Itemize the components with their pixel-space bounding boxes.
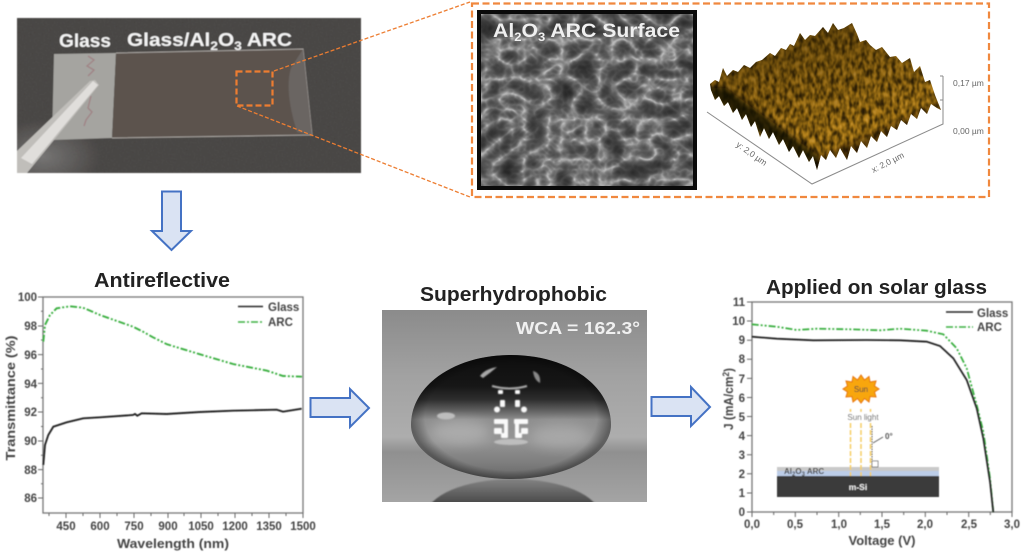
x axis labels: 1500 [290, 521, 316, 533]
x axis labels: 2,0 [917, 519, 933, 531]
layer labels: ARC [805, 467, 824, 476]
label: Glass/Al2O3 ARC: O [218, 30, 234, 50]
layer labels: 2 [792, 472, 796, 478]
axis title: Voltage: Voltage (V) [848, 533, 916, 548]
arrow: right 2 [652, 387, 710, 426]
icon: sun [843, 375, 879, 403]
SEM heading: Al [493, 20, 512, 42]
x axis labels: 1200 [222, 521, 248, 533]
y axis labels: 0 [739, 507, 745, 519]
x axis labels: 600 [90, 521, 110, 533]
heading: Superhydrophobic: Superhydrophobic [420, 284, 607, 306]
legend: ARC [268, 317, 293, 329]
SEM heading: 2 [514, 30, 522, 44]
heading: Antireflective: Antireflective [94, 270, 230, 292]
y axis labels: 98 [24, 321, 38, 333]
AFM axes [707, 76, 943, 184]
inset: solar cell schematic: m-Si [849, 482, 867, 492]
y axis labels: 92 [24, 407, 37, 419]
y axis labels: 8 [739, 354, 746, 366]
inset: solar cell schematic: Sun light [847, 413, 879, 422]
x axis labels: 1,0 [831, 519, 847, 531]
layer labels: 3 [802, 472, 806, 478]
x axis labels: 750 [124, 521, 144, 533]
y axis labels: 7 [739, 374, 745, 386]
SEM heading: ARC Surface [545, 20, 680, 42]
coated glass area [112, 49, 312, 138]
uncoated glass area [52, 53, 116, 140]
AFM labels: x: 2,0 µm [870, 150, 906, 175]
y axis labels: 9 [739, 335, 745, 347]
x axis labels: 450 [56, 521, 76, 533]
x axis labels [56, 521, 316, 533]
photo: water droplet [382, 310, 647, 502]
x axis labels: 1050 [188, 521, 214, 533]
AFM labels [734, 78, 984, 175]
layer labels: Al [784, 467, 792, 476]
label: Glass/Al2O3 ARC: Glass/Al [127, 30, 199, 50]
WCA label: WCA = 162.3° [516, 318, 640, 338]
layer labels: O [795, 467, 802, 476]
axis title: Wavelength: Wavelength (nm) [117, 536, 229, 551]
AFM labels: y: 2,0 µm [734, 139, 769, 168]
axis title: J: J (mA/cm [721, 371, 736, 430]
y axis labels [18, 292, 38, 505]
droplet glints [437, 367, 540, 445]
light rays [850, 409, 870, 476]
inset: solar cell schematic: 0° [885, 432, 893, 441]
handwriting on glass [84, 56, 94, 126]
x axis labels: 900 [158, 521, 178, 533]
inset: solar cell schematic: Sun [854, 385, 868, 394]
y axis labels: 1 [739, 488, 746, 500]
legend: ARC [977, 322, 1002, 334]
ARC layer [777, 467, 939, 476]
y axis labels: 4 [739, 431, 746, 443]
AFM labels: 0,17 µm [953, 78, 984, 88]
tweezers [17, 80, 99, 173]
m-Si layer [777, 476, 939, 497]
legend [238, 302, 299, 329]
y axis labels: 90 [24, 436, 37, 448]
normal line and angle [871, 426, 873, 467]
chart: transmittance [3, 292, 316, 551]
y axis labels: 96 [24, 350, 37, 362]
x axis labels: 2,5 [961, 519, 978, 531]
y axis labels: 2 [739, 469, 745, 481]
x axis labels: 1,5 [874, 519, 891, 531]
SEM heading: O [521, 20, 538, 42]
y axis labels: 88 [24, 465, 38, 477]
legend: Glass [268, 302, 299, 314]
y axis labels: 11 [733, 297, 746, 309]
label: Glass/Al2O3 ARC: 2 [210, 39, 218, 53]
axis title: J: ) [721, 368, 736, 372]
droplet [411, 355, 611, 479]
photo: coated glass slide [17, 18, 361, 173]
y axis labels: 10 [732, 316, 745, 328]
panel: surface detail [472, 4, 989, 197]
label: Glass: Glass [59, 31, 111, 51]
curve: Glass [752, 337, 993, 512]
AFM labels: 0,00 µm [953, 126, 984, 136]
droplet soft highlights [430, 420, 590, 448]
x axis labels: 1350 [256, 521, 282, 533]
y axis labels: 5 [739, 412, 746, 424]
y axis labels: 94 [24, 379, 38, 391]
AFM dark lower edges [710, 84, 824, 170]
SEM image [478, 11, 696, 189]
chart: J-V curve [721, 297, 1020, 548]
x axis labels [744, 519, 1020, 531]
legend: Glass [977, 308, 1008, 320]
x axis labels: 0,5 [787, 519, 804, 531]
AFM 3D surface [700, 18, 984, 184]
zoom marker and connector lines [236, 2, 470, 197]
axis title: J: 2 [721, 372, 731, 377]
curve: Glass [43, 409, 302, 465]
label: Glass/Al2O3 ARC: 3 [234, 39, 242, 53]
y axis labels [732, 297, 746, 519]
axis title: Transmittance: Transmittance (%) [3, 336, 18, 460]
y axis labels: 3 [739, 450, 745, 462]
SEM heading: 3 [538, 30, 546, 44]
label: Glass/Al2O3 ARC: ARC [242, 30, 292, 50]
heading: Applied on solar glass: Applied on solar glass [766, 277, 987, 299]
y axis labels: 86 [24, 493, 37, 505]
reflection [432, 479, 594, 502]
curve: ARC [43, 306, 302, 377]
y axis labels: 100 [18, 292, 37, 304]
legend [946, 308, 1008, 334]
y axis labels: 6 [739, 393, 745, 405]
arrow: down [152, 192, 191, 250]
x axis labels: 0,0 [744, 519, 760, 531]
inset: solar cell schematic [777, 375, 939, 497]
x axis labels: 3,0 [1004, 519, 1020, 531]
curve: ARC [752, 324, 993, 512]
arrow: right 1 [310, 389, 369, 427]
